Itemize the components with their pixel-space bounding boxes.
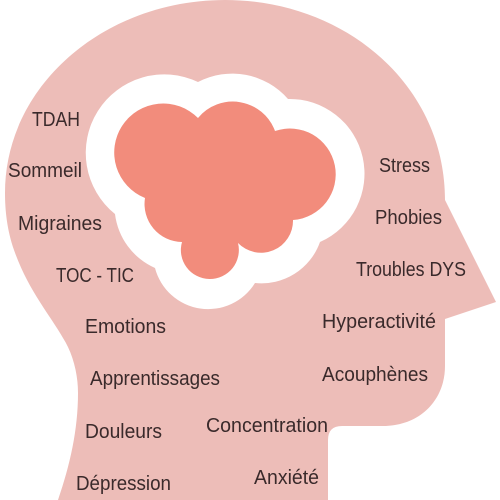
label: Anxiété: Anxiété	[254, 467, 319, 489]
label: Acouphènes: Acouphènes	[322, 364, 428, 386]
brain cloud	[114, 102, 336, 279]
label: Sommeil: Sommeil	[8, 160, 82, 182]
label: Migraines: Migraines	[18, 213, 102, 235]
label: Concentration: Concentration	[206, 415, 328, 437]
labels	[8, 109, 466, 495]
label: Phobies: Phobies	[375, 207, 442, 229]
label: Troubles DYS: Troubles DYS	[356, 259, 466, 281]
label: Dépression: Dépression	[76, 473, 171, 495]
label: TDAH: TDAH	[32, 109, 80, 131]
label: TOC - TIC: TOC - TIC	[56, 265, 134, 287]
brain cloud white halo	[86, 74, 364, 309]
label: Douleurs: Douleurs	[85, 421, 162, 443]
label: Apprentissages: Apprentissages	[90, 368, 220, 390]
label: Emotions: Emotions	[85, 316, 166, 338]
label: Stress: Stress	[379, 155, 430, 177]
label: Hyperactivité: Hyperactivité	[322, 311, 436, 333]
